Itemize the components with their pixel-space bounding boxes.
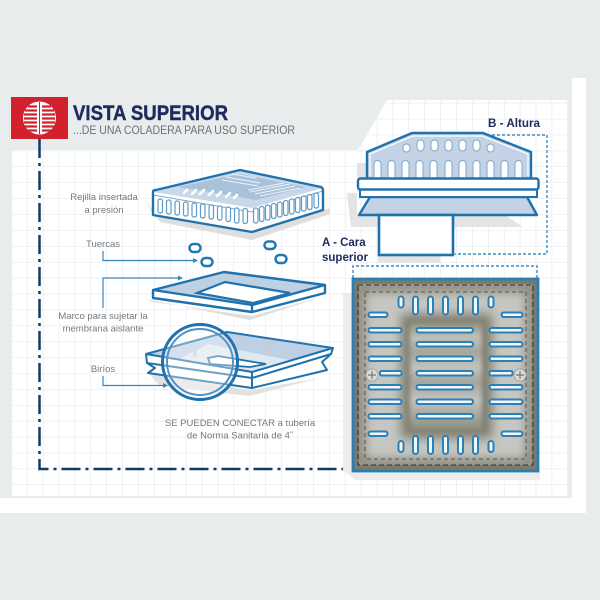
label: A top face: A - Cara (322, 237, 366, 249)
side slots (158, 193, 318, 224)
label: o-rings: Biríos (91, 364, 115, 375)
slots (368, 296, 522, 454)
label: grate: a presión (84, 205, 124, 216)
icon: snap-in grate (146, 170, 330, 240)
white paper strip (0, 78, 586, 513)
note: pipe connection: de Norma Sanitaria de 4˝ (187, 430, 294, 442)
note: pipe connection: SE PUEDEN CONECTAR a tubería (165, 418, 315, 429)
dimension B: height (455, 135, 547, 254)
icon: top view grate (353, 279, 538, 471)
dimension A: top face (353, 266, 537, 278)
grate shadow (343, 293, 540, 480)
label: frame: membrana aislante (63, 324, 143, 334)
header logo (11, 97, 68, 139)
grid panel (12, 100, 568, 496)
stitched dashes (358, 285, 533, 465)
label: B height: B - Altura (488, 118, 541, 130)
label: nuts: Tuercas (86, 239, 120, 250)
label: frame: Marco para sujetar la (58, 311, 148, 322)
screws (366, 369, 526, 381)
icon: membrane frame (146, 272, 325, 320)
label: A top face: superior (322, 252, 369, 264)
arrow: o-rings (103, 376, 168, 388)
arrow: nuts (103, 251, 198, 263)
subtitle: ...DE UNA COLADERA PARA USO SUPERIOR (73, 123, 295, 137)
dash-dot guide line (40, 139, 352, 469)
icon: nuts (190, 242, 286, 266)
icon: base with bolts and ring (142, 324, 333, 400)
icon: side view (347, 133, 538, 263)
title: VISTA SUPERIOR (73, 102, 228, 125)
arrow: frame (103, 276, 183, 308)
label: grate: Rejilla insertada (70, 192, 138, 203)
